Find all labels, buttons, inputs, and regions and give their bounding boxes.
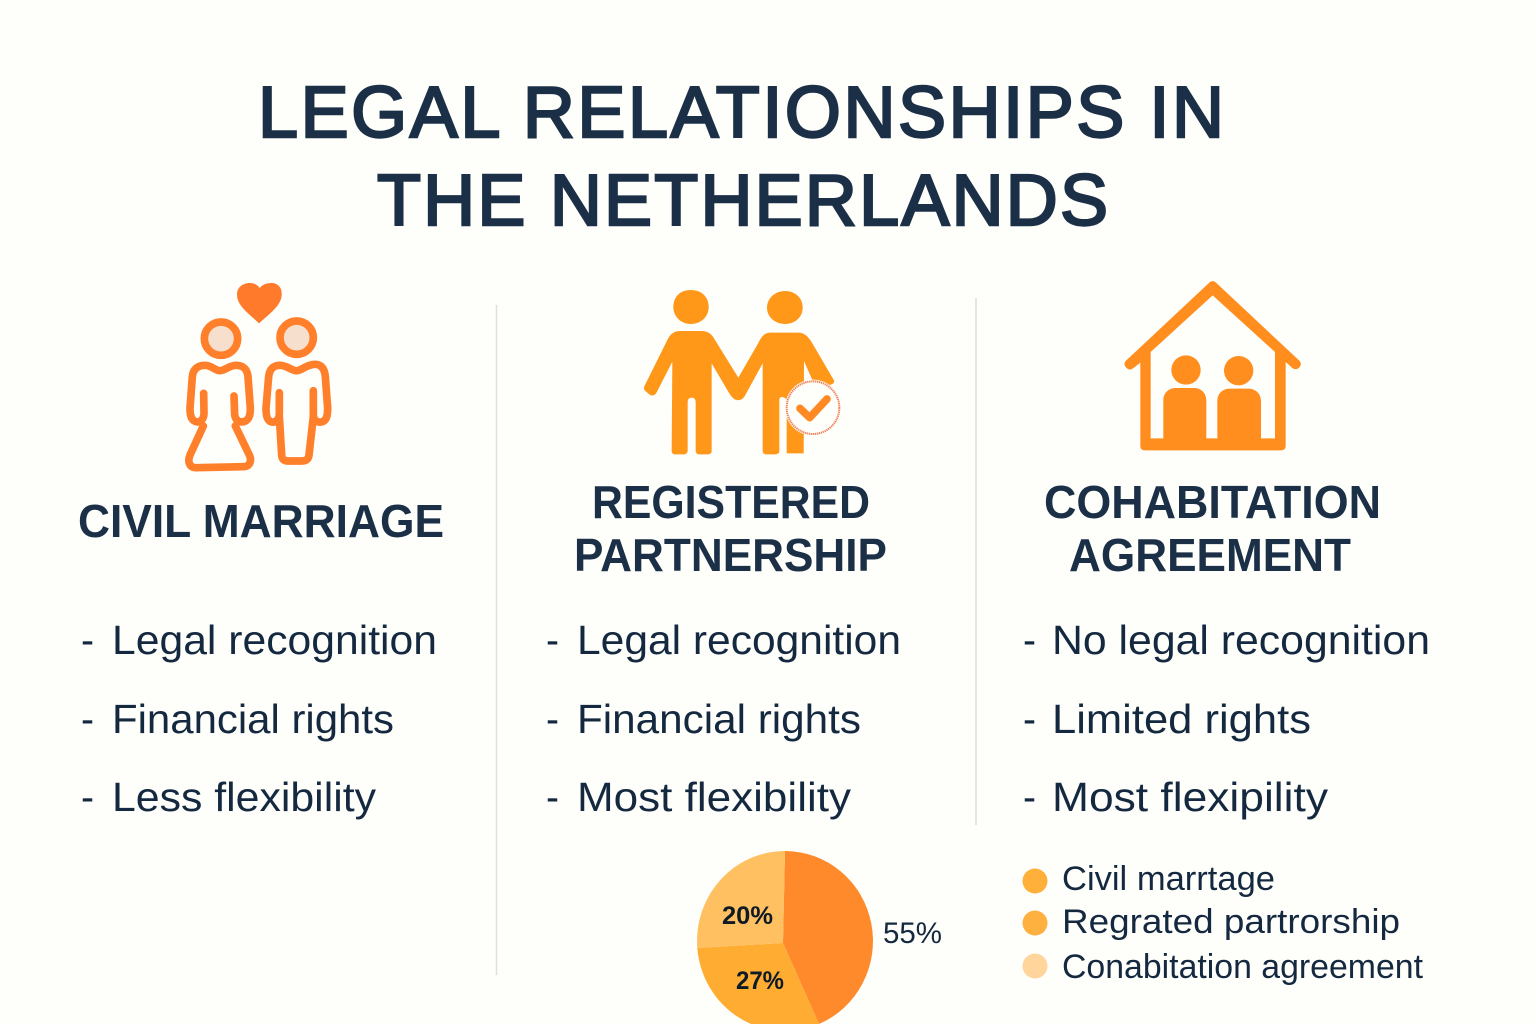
- legend: [1022, 860, 1424, 986]
- heading: cohabitation agreement: [1044, 476, 1381, 581]
- legend: Civil marrtage: [1062, 860, 1275, 898]
- pie label: 55%: 55%: [883, 917, 942, 950]
- heading: civil marriage: CIVIL MARRIAGE: [78, 495, 444, 547]
- list: cohabitation agreement: [1023, 617, 1430, 820]
- heading: registered partnership: [574, 476, 887, 581]
- legend: Regrated partrorship: [1062, 903, 1400, 941]
- list: civil marriage: -: [81, 774, 94, 820]
- heading: cohabitation agreement: AGREEMENT: [1069, 529, 1351, 581]
- icon: house with two people: [1124, 281, 1301, 450]
- panel: civil marriage: [78, 283, 444, 820]
- list: cohabitation agreement: Limited rights: [1052, 696, 1311, 742]
- panel: cohabitation agreement: [1023, 281, 1430, 820]
- list: civil marriage: -: [81, 617, 94, 663]
- heading: cohabitation agreement: COHABITATION: [1044, 476, 1381, 528]
- list: cohabitation agreement: -: [1023, 617, 1036, 663]
- legend: Conabitation agreement: [1062, 948, 1424, 986]
- title: LEGAL RELATIONSHIPS IN: [258, 73, 1224, 153]
- list: registered partnership: Financial rights: [577, 696, 861, 742]
- list: civil marriage: [81, 617, 437, 820]
- list: civil marriage: Legal recognition: [112, 617, 437, 663]
- pie slice: 55%: [783, 851, 873, 1024]
- list: civil marriage: Financial rights: [112, 696, 394, 742]
- title: [258, 73, 1224, 241]
- heading: registered partnership: PARTNERSHIP: [574, 529, 887, 581]
- pie slice: 20%: [697, 851, 785, 948]
- list: registered partnership: -: [546, 696, 559, 742]
- panel: registered partnership: [546, 290, 901, 820]
- list: registered partnership: Most flexibility: [577, 774, 852, 820]
- title: THE NETHERLANDS: [377, 161, 1108, 241]
- icon: couple with heart: [189, 283, 328, 468]
- list: registered partnership: Legal recognition: [577, 617, 901, 663]
- pie chart: [697, 851, 942, 1024]
- list: cohabitation agreement: -: [1023, 774, 1036, 820]
- list: cohabitation agreement: -: [1023, 696, 1036, 742]
- pie label: 20%: 20%: [722, 902, 773, 930]
- heading: registered partnership: REGISTERED: [592, 476, 870, 528]
- pie slice: 27%: [697, 943, 819, 1024]
- list: civil marriage: Less flexibility: [112, 774, 377, 820]
- list: registered partnership: -: [546, 617, 559, 663]
- icon: two people holding hands with check badge: [644, 290, 841, 454]
- list: registered partnership: [546, 617, 901, 820]
- list: cohabitation agreement: No legal recognition: [1052, 617, 1430, 663]
- pie label: 27%: 27%: [736, 967, 784, 995]
- list: cohabitation agreement: Most flexipility: [1052, 774, 1329, 820]
- list: registered partnership: -: [546, 774, 559, 820]
- list: civil marriage: -: [81, 696, 94, 742]
